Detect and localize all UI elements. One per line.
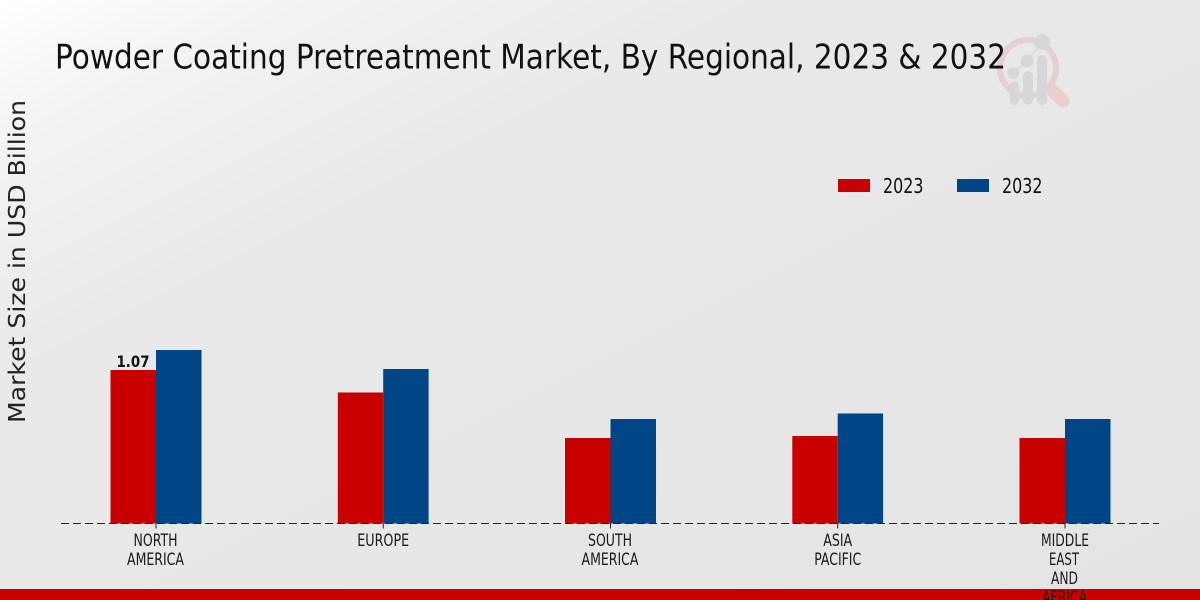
bars: North America	[110, 350, 202, 524]
title: Powder Coating Pretreatment Market, By Regional, 2023 & 2032	[55, 38, 1006, 78]
legend item: 2023: 2023	[883, 174, 924, 198]
label: South America: AMERICA	[582, 550, 639, 570]
bars: Middle East and Africa	[1020, 419, 1110, 524]
bars: Europe	[338, 369, 429, 524]
label: Middle East and Africa	[1041, 531, 1089, 600]
bars: Asia Pacific	[792, 414, 883, 524]
label: Europe: EUROPE	[357, 531, 409, 551]
label: Asia Pacific: PACIFIC	[814, 550, 861, 570]
legend item: 2032	[957, 174, 1042, 198]
label: North America: AMERICA	[127, 550, 184, 570]
legend item: 2023	[838, 174, 924, 198]
legend item: 2032: 2032	[1002, 174, 1042, 198]
y axis label: Market Size in USD Billion	[3, 100, 31, 423]
label: North America	[127, 531, 184, 570]
label: Middle East and Africa: AND	[1051, 569, 1078, 589]
label: Middle East and Africa: MIDDLE	[1041, 531, 1089, 551]
label: North America: NORTH	[134, 531, 178, 551]
footer band	[0, 589, 1200, 600]
legend	[838, 174, 1042, 198]
label: Asia Pacific	[814, 531, 861, 570]
x axis labels	[127, 531, 1089, 600]
bars: South America	[565, 419, 656, 524]
label: Asia Pacific: ASIA	[823, 531, 852, 551]
bar chart	[61, 350, 1159, 528]
icon: watermark logo magnifier with bars	[1000, 34, 1063, 105]
label: South America: SOUTH	[588, 531, 632, 551]
value label: 1.07: 1.07	[116, 352, 150, 371]
label: Middle East and Africa: EAST	[1049, 550, 1079, 570]
label: South America	[582, 531, 639, 570]
